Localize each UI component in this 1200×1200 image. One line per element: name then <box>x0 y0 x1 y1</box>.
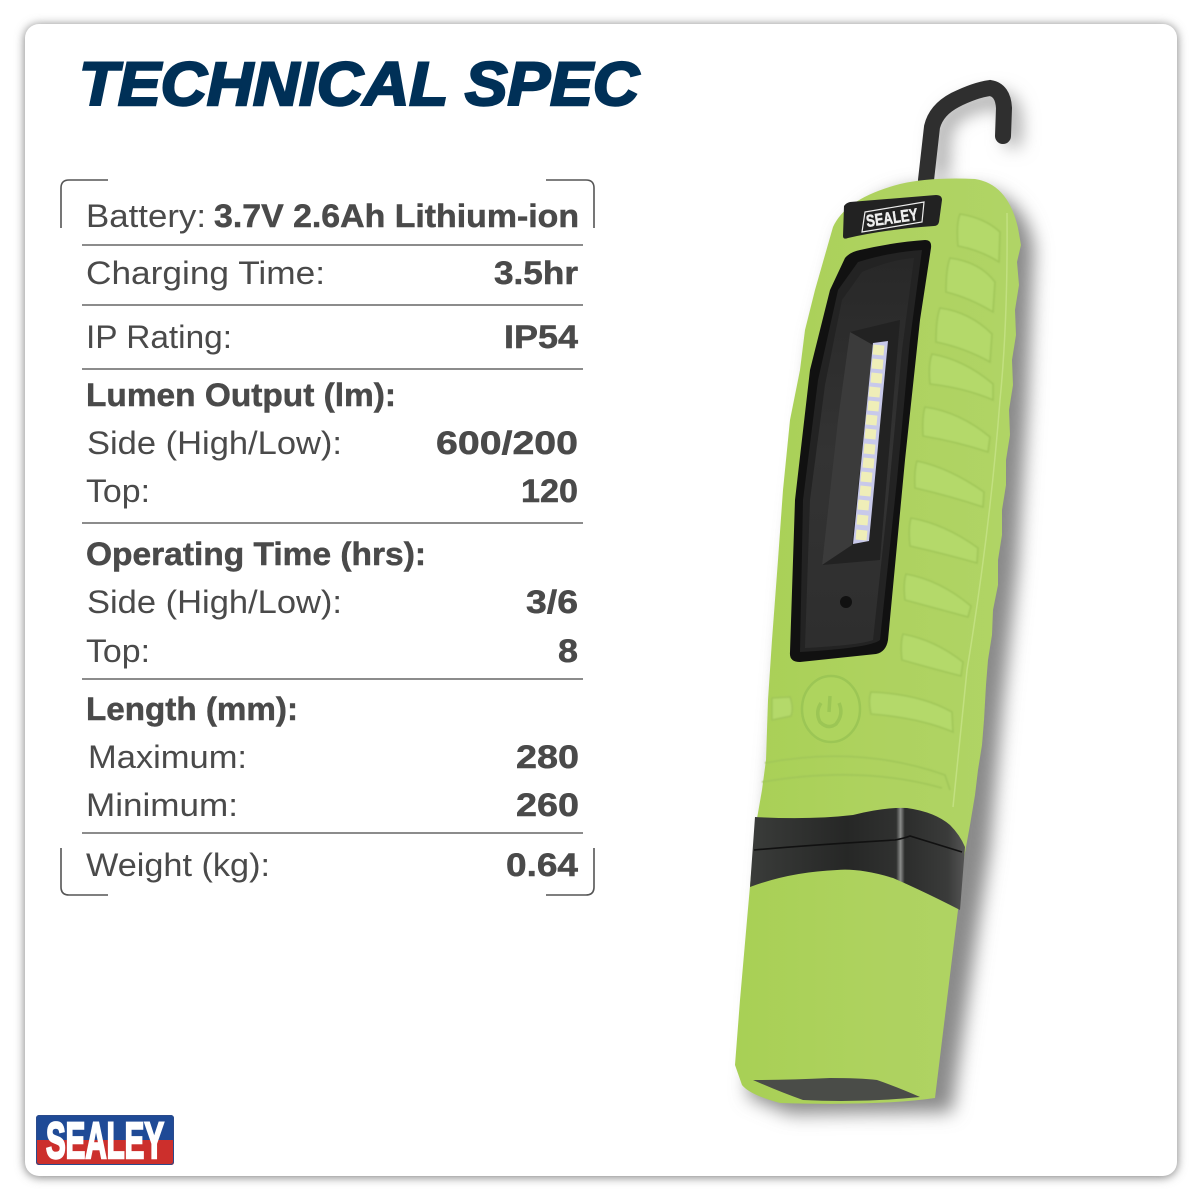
torch shadow <box>748 100 1034 1114</box>
sensor dot <box>840 596 852 608</box>
group: length: Length (mm): <box>86 691 298 727</box>
row: IP rating: IP54 <box>504 319 578 355</box>
group: length: 280 <box>516 739 579 775</box>
group: operating time: Top: <box>86 633 150 669</box>
body seam line <box>953 213 1007 807</box>
product: inspection torch <box>735 88 1034 1114</box>
group: lumen output <box>86 377 578 509</box>
lens window <box>790 240 931 662</box>
battery base plate <box>753 1078 920 1101</box>
group: lumen output: Side (High/Low): <box>87 425 342 461</box>
group: lumen output: Lumen Output (lm): <box>86 377 396 413</box>
group: length: Maximum: <box>88 739 247 775</box>
LED strip <box>853 341 888 544</box>
row: charging time <box>86 255 578 291</box>
group: length: 260 <box>516 787 579 823</box>
group: length <box>86 691 579 823</box>
power button <box>802 676 860 742</box>
row: IP rating <box>86 319 578 355</box>
logo: Sealey <box>36 1112 174 1169</box>
row: charging time: Charging Time: <box>86 255 325 291</box>
group: operating time: 3/6 <box>526 584 578 620</box>
angled LED recess <box>822 320 900 565</box>
logo: Sealey: SEALEY <box>46 1112 164 1169</box>
row dividers <box>82 245 583 833</box>
group: length: Minimum: <box>86 787 238 823</box>
row: charging time: 3.5hr <box>494 255 578 291</box>
row: battery: Battery: <box>86 198 206 234</box>
group: lumen output: 600/200 <box>436 425 578 461</box>
row: weight <box>86 847 578 883</box>
title: TECHNICAL SPEC <box>79 50 640 118</box>
group: operating time: 8 <box>558 633 578 669</box>
group: operating time: Operating Time (hrs): <box>86 536 426 572</box>
panel: specification table <box>61 180 594 895</box>
group: operating time <box>86 536 578 669</box>
group: lumen output: Top: <box>86 473 150 509</box>
hook <box>926 88 1004 180</box>
corner brackets <box>61 180 594 895</box>
group: lumen output: 120 <box>521 473 578 509</box>
black collar band <box>750 808 965 910</box>
row: battery: 3.7V 2.6Ah Lithium-ion <box>214 198 579 234</box>
row: battery <box>86 198 579 234</box>
row: weight: 0.64 <box>506 847 578 883</box>
torch body <box>735 179 1021 1104</box>
grip ribs <box>762 214 1000 790</box>
group: operating time: Side (High/Low): <box>87 584 342 620</box>
row: weight: Weight (kg): <box>86 847 270 883</box>
badge with brand name <box>843 195 942 239</box>
row: IP rating: IP Rating: <box>86 319 232 355</box>
badge with brand name: SEALEY <box>865 205 920 231</box>
